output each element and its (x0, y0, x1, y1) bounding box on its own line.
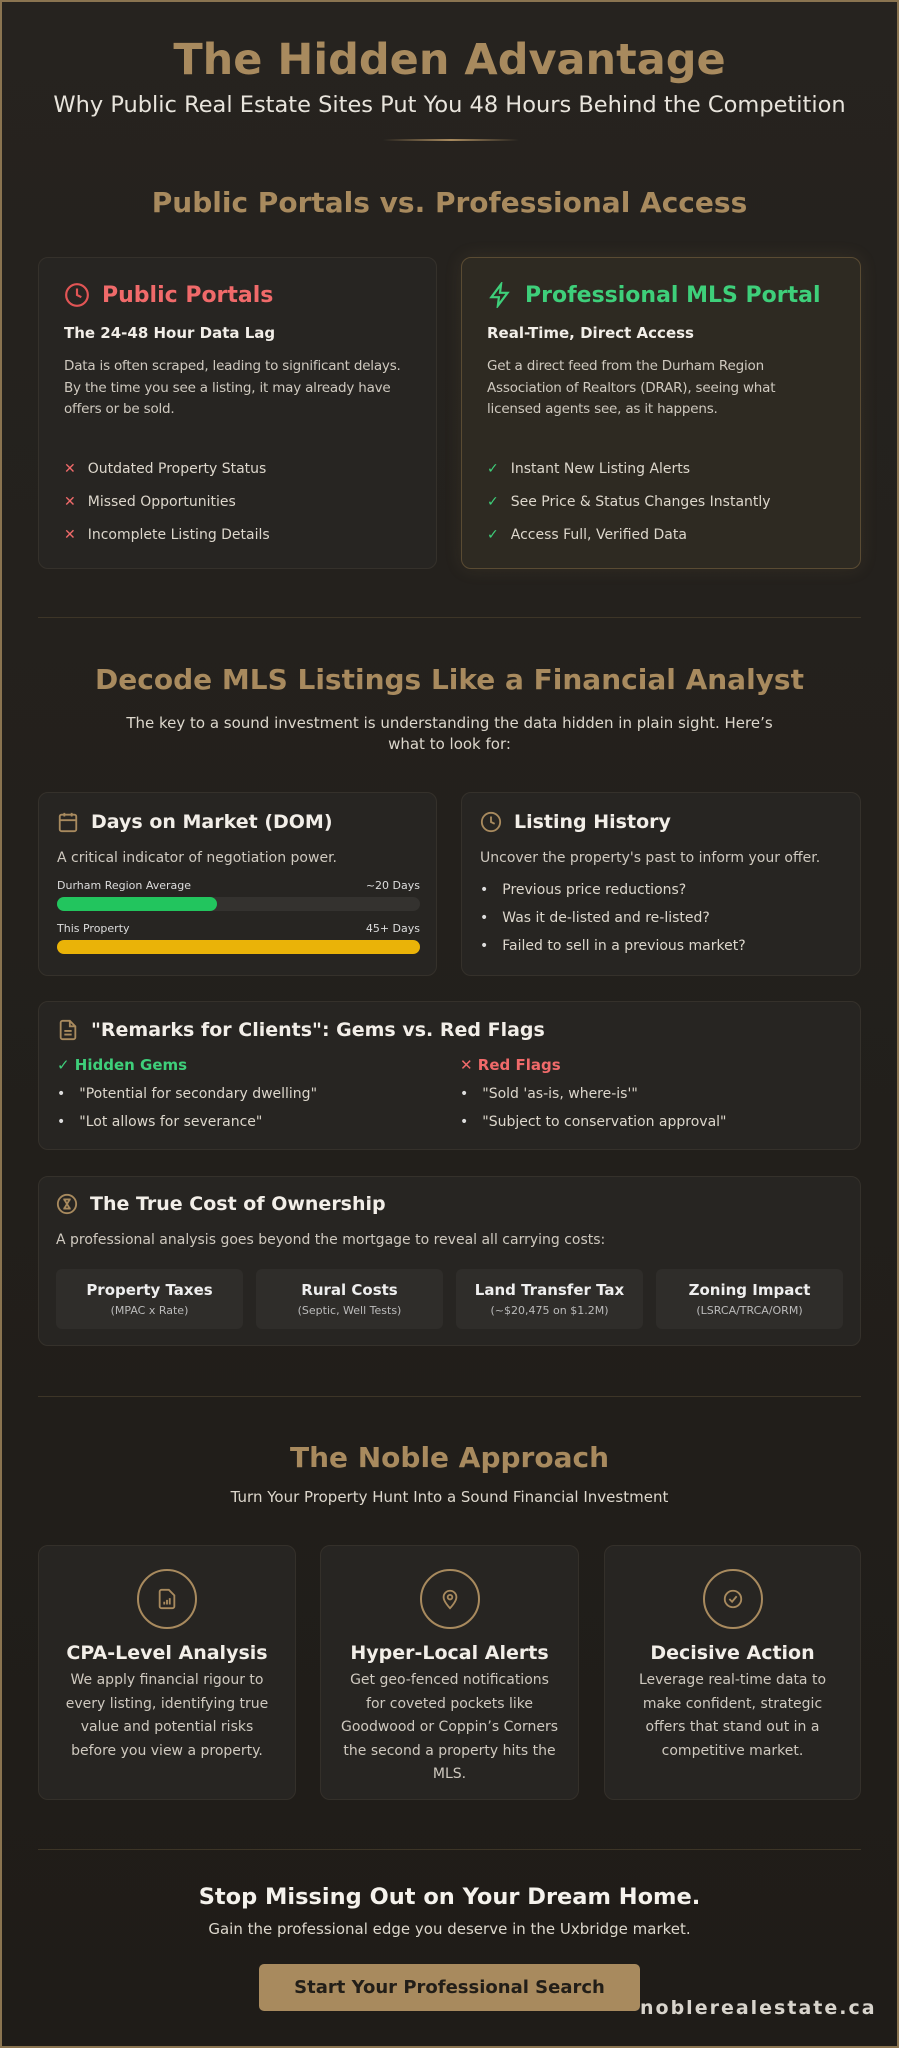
title: The Hidden Advantage (173, 35, 726, 85)
bar chart: DOM comparison: ~20 Days (366, 879, 420, 892)
list: hidden gems: ✓ Hidden Gems (57, 1056, 187, 1074)
list: drawbacks: Missed Opportunities (88, 494, 236, 510)
heading: comparison: Public Portals vs. Professional Access (152, 186, 747, 219)
heading: listing history: Listing History (514, 811, 671, 833)
heading: DOM: Days on Market (DOM) (91, 811, 333, 833)
bar chart: DOM comparison: Durham Region Average (57, 879, 191, 892)
list: history questions: Was it de-listed and re-listed? (502, 910, 710, 926)
bar chart: DOM comparison (56, 879, 420, 954)
cost item: property taxes: Property Taxes (86, 1281, 213, 1299)
list: drawbacks: Outdated Property Status (88, 460, 266, 476)
panel: true cost (38, 1176, 861, 1346)
list: drawbacks: ✕ (64, 460, 76, 476)
text: Turn Your Property Hunt Into a Sound Financial Investment (231, 1488, 668, 1506)
heading: decode: Decode MLS Listings Like a Financial Analyst (95, 663, 804, 696)
list: drawbacks: Incomplete Listing Details (88, 526, 270, 542)
cost item: rural costs: (Septic, Well Tests) (298, 1304, 401, 1317)
card: decisive action (604, 1545, 861, 1800)
CTA heading: Stop Missing Out on Your Dream Home. (199, 1884, 700, 1910)
icon: report (137, 1569, 197, 1629)
list: red flags: "Subject to conservation approval" (482, 1114, 726, 1130)
bar chart: DOM comparison: 45+ Days (366, 922, 420, 935)
icon: map pin (420, 1569, 480, 1629)
heading: remarks: "Remarks for Clients": Gems vs. Red Flags (91, 1019, 545, 1041)
card: hyper-local alerts: Get geo-fenced notifications for coveted pockets like Goodwood or Coppin’s Corners the second a property hits the MLS. (341, 1672, 558, 1782)
list: drawbacks: ✕ (64, 526, 76, 542)
website url: noblerealestate.ca (640, 1997, 877, 2019)
cost item: zoning: (LSRCA/TRCA/ORM) (696, 1304, 803, 1317)
cost item: property taxes (56, 1269, 243, 1329)
list: hidden gems (57, 1056, 317, 1130)
panel: professional MLS: Get a direct feed from the Durham Region Association of Realtors (DRAR), seeing what licensed agents see, as it happens. (487, 358, 775, 417)
heading: public portals: Public Portals (102, 282, 273, 308)
subtitle: Why Public Real Estate Sites Put You 48 Hours Behind the Competition (53, 92, 846, 118)
heading: true cost: The True Cost of Ownership (90, 1193, 386, 1215)
panel: remarks (38, 1001, 861, 1150)
card: CPA analysis: We apply financial rigour to every listing, identifying true value and potential risks before you view a property. (66, 1672, 268, 1758)
cost item: land transfer tax: (~$20,475 on $1.2M) (491, 1304, 608, 1317)
cost item: zoning: Zoning Impact (689, 1281, 810, 1299)
list: benefits (487, 460, 771, 542)
list: benefits: ✓ (487, 460, 499, 476)
panel: DOM: A critical indicator of negotiation power. (57, 850, 337, 866)
text: real-time: Real-Time, Direct Access (487, 324, 694, 342)
list: history questions (482, 882, 746, 954)
cost item: rural costs: Rural Costs (301, 1281, 398, 1299)
list: benefits: See Price & Status Changes Instantly (511, 494, 771, 510)
cost item: land transfer tax: Land Transfer Tax (475, 1281, 624, 1299)
panel: DOM (38, 792, 437, 976)
text: data lag: The 24-48 Hour Data Lag (64, 324, 275, 342)
panel: public portals: Data is often scraped, leading to significant delays. By the time you see a listing, it may already have offers or be sold. (64, 358, 401, 417)
list: hidden gems: "Potential for secondary dwelling" (79, 1086, 317, 1102)
cost item: land transfer tax (456, 1269, 643, 1329)
panel: public portals (38, 257, 437, 569)
cost item: property taxes: (MPAC x Rate) (111, 1304, 188, 1317)
text: A professional analysis goes beyond the mortgage to reveal all carrying costs: (56, 1232, 605, 1248)
button: start search: Start Your Professional Search (294, 1977, 605, 1998)
list: history questions: Previous price reductions? (502, 882, 686, 898)
list: benefits: Access Full, Verified Data (511, 526, 687, 542)
icon: check circle (702, 1569, 762, 1629)
heading: noble approach: The Noble Approach (290, 1441, 609, 1474)
card: decisive action: Decisive Action (650, 1642, 815, 1664)
panel: listing history (461, 792, 861, 976)
panel: listing history: Uncover the property's past to inform your offer. (480, 850, 820, 866)
list: red flags (460, 1056, 726, 1130)
card: hyper-local alerts (320, 1545, 579, 1800)
list: red flags: ✕ Red Flags (460, 1056, 561, 1074)
intro text: The key to a sound investment is understanding the data hidden in plain sight. Here’s what to look for: (126, 714, 773, 753)
list: history questions: Failed to sell in a previous market? (502, 938, 746, 954)
list: red flags: "Sold 'as-is, where-is'" (482, 1086, 638, 1102)
list: benefits: Instant New Listing Alerts (511, 460, 690, 476)
list: hidden gems: "Lot allows for severance" (79, 1114, 262, 1130)
cost item: rural costs (256, 1269, 443, 1329)
card: hyper-local alerts: Hyper-Local Alerts (350, 1642, 549, 1664)
card: CPA analysis (38, 1545, 296, 1800)
card: CPA analysis: CPA-Level Analysis (66, 1642, 268, 1664)
text: Gain the professional edge you deserve in the Uxbridge market. (208, 1920, 691, 1938)
list: benefits: ✓ (487, 494, 499, 510)
button: start search (259, 1964, 640, 2011)
list: benefits: ✓ (487, 526, 499, 542)
list: drawbacks (64, 460, 270, 542)
bar chart: DOM comparison: This Property (57, 922, 130, 935)
list: drawbacks: ✕ (64, 494, 76, 510)
panel: professional MLS (461, 257, 861, 569)
cost item: zoning (656, 1269, 843, 1329)
heading: professional MLS portal: Professional MLS Portal (525, 282, 821, 308)
card: decisive action: Leverage real-time data to make confident, strategic offers that stand out in a competitive market. (639, 1672, 826, 1758)
